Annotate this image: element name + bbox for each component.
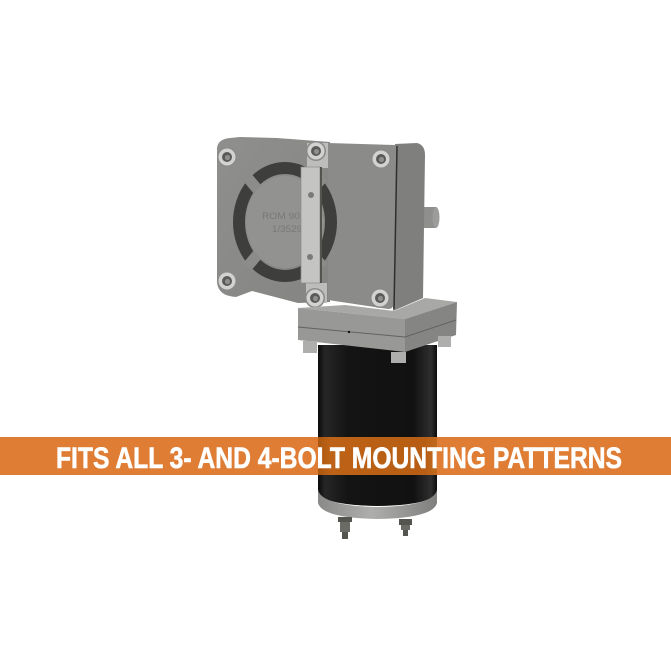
- embossed casting marks: 1/3529: [272, 224, 302, 234]
- vented ring slots: [239, 168, 331, 276]
- orange banner: [0, 437, 671, 475]
- dark edge line of front cover: [394, 146, 397, 309]
- gearbox side wall: [393, 143, 425, 311]
- block studs: [303, 336, 451, 363]
- gearbox motor product photo: [217, 137, 457, 539]
- gearbox rear plate: [217, 137, 330, 303]
- embossed casting marks: ROM 90: [262, 211, 300, 221]
- gearbox front cover: [328, 143, 397, 309]
- embossed casting marks: [262, 211, 302, 234]
- electrical terminals: [338, 517, 412, 539]
- centre mounting bracket: [301, 143, 328, 303]
- mounting block: [298, 298, 457, 352]
- motor body: [318, 345, 437, 519]
- side output stud: [422, 207, 440, 228]
- banner over motor: [318, 437, 437, 475]
- motor end cap: [318, 490, 437, 519]
- socket head bolts: [217, 141, 391, 308]
